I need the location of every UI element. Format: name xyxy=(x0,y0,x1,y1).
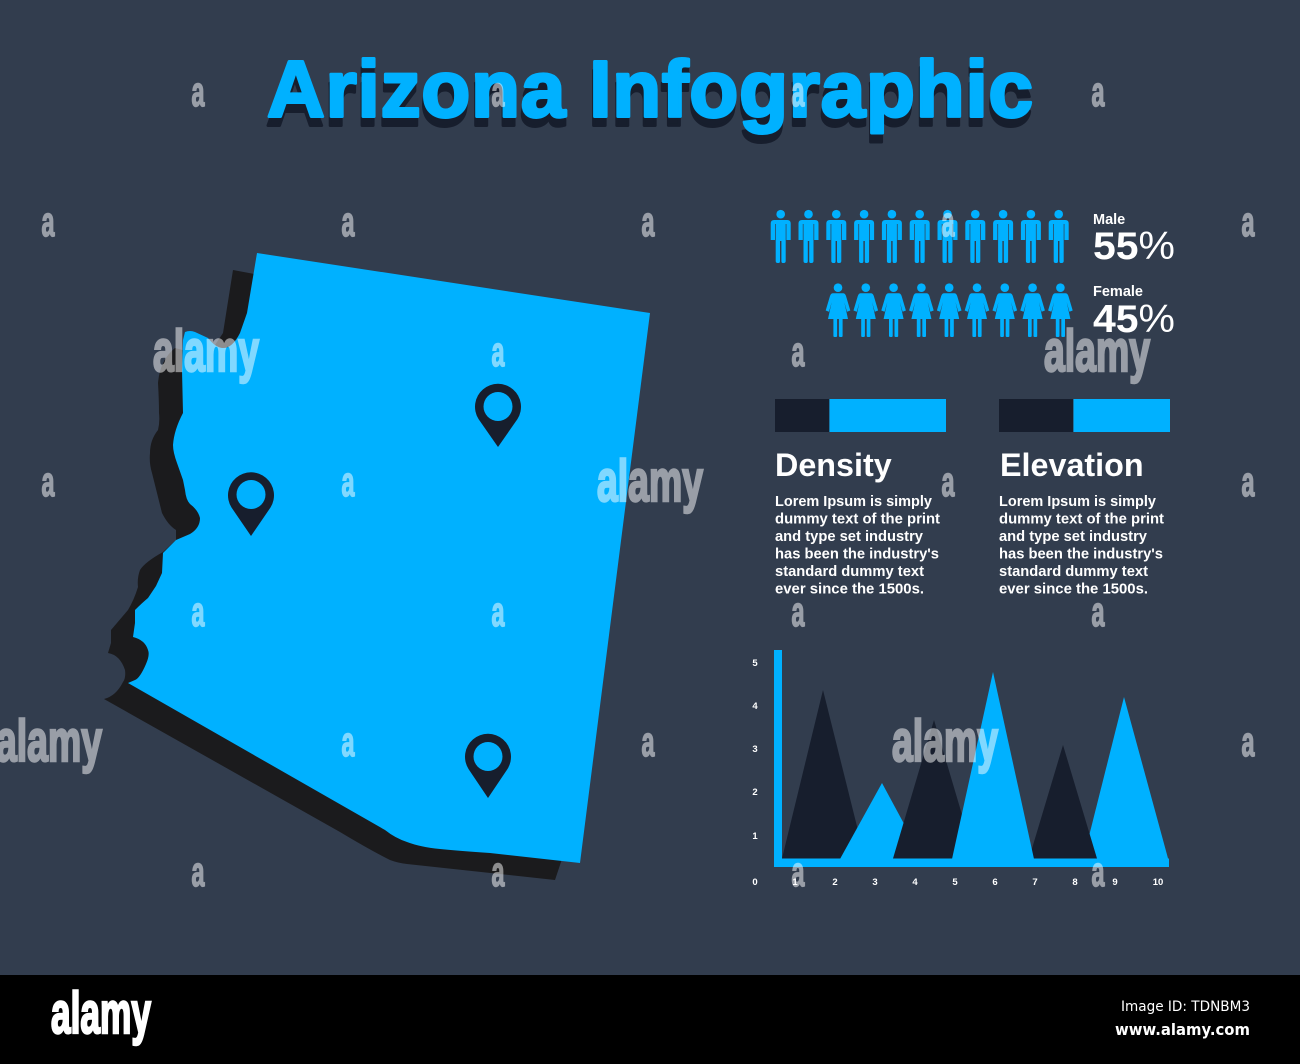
elevation text: Lorem Ipsum is simply xyxy=(999,494,1156,510)
image id: Image ID: TDNBM3 xyxy=(1121,999,1250,1015)
watermark pattern: a xyxy=(942,458,955,505)
watermark pattern: a xyxy=(342,198,355,245)
density text: ever since the 1500s. xyxy=(775,582,924,598)
map land xyxy=(128,253,650,863)
watermark pattern: a xyxy=(342,718,355,765)
map: Arizona state xyxy=(104,253,650,880)
density bar xyxy=(775,399,946,432)
elevation bar xyxy=(999,399,1170,432)
chart y axis labels: 4 xyxy=(752,701,758,712)
watermark pattern: a xyxy=(792,588,805,635)
watermark pattern: a xyxy=(1092,588,1105,635)
elevation text xyxy=(999,494,1164,598)
elevation text: ever since the 1500s. xyxy=(999,582,1148,598)
watermark pattern: alamy xyxy=(0,709,102,774)
chart x axis labels: 8 xyxy=(1072,877,1078,888)
density heading: Density xyxy=(775,447,892,483)
icon: map pin north xyxy=(475,384,521,447)
icon: map pin south xyxy=(465,734,511,798)
chart y axis labels: 3 xyxy=(752,744,758,755)
chart triangles xyxy=(782,672,1169,862)
watermark pattern: a xyxy=(492,68,505,115)
title: Arizona Infographic xyxy=(266,54,1032,142)
watermark pattern: a xyxy=(192,848,205,895)
triangle chart xyxy=(752,650,1169,888)
watermark pattern: a xyxy=(1242,718,1255,765)
watermark pattern: a xyxy=(42,458,55,505)
watermark pattern: a xyxy=(1092,68,1105,115)
chart x axis labels: 5 xyxy=(952,877,958,888)
watermark pattern: alamy xyxy=(597,449,703,514)
chart x axis labels: 0 xyxy=(752,877,758,888)
watermark pattern: a xyxy=(1242,198,1255,245)
watermark pattern: a xyxy=(1242,458,1255,505)
watermark pattern: alamy xyxy=(153,319,259,384)
chart y axis labels: 2 xyxy=(752,787,758,798)
chart y axis labels: 1 xyxy=(752,831,758,842)
watermark pattern: a xyxy=(492,848,505,895)
footer bar xyxy=(0,975,1300,1064)
icon: map pin west xyxy=(228,472,274,536)
watermark pattern: a xyxy=(192,588,205,635)
panel: density xyxy=(775,399,946,598)
chart x axis labels: 6 xyxy=(992,877,998,888)
density text: has been the industry's xyxy=(775,546,939,562)
watermark pattern: alamy xyxy=(1044,319,1150,384)
panel: elevation xyxy=(999,399,1170,598)
watermark pattern: a xyxy=(492,588,505,635)
map shadow xyxy=(104,270,565,880)
watermark pattern: a xyxy=(42,198,55,245)
watermark pattern: a xyxy=(642,718,655,765)
watermark pattern: a xyxy=(642,198,655,245)
elevation text: standard dummy text xyxy=(999,564,1148,580)
chart x axis labels: 1 xyxy=(792,877,798,888)
density text xyxy=(775,494,940,598)
footer logo: alamy xyxy=(51,981,151,1046)
chart y axis labels xyxy=(752,658,758,842)
elevation text: has been the industry's xyxy=(999,546,1163,562)
chart x axis labels: 10 xyxy=(1153,877,1163,888)
female statistic: 45% xyxy=(1093,298,1175,341)
watermark pattern: a xyxy=(942,198,955,245)
watermark pattern: a xyxy=(342,458,355,505)
chart y axis labels: 5 xyxy=(752,658,758,669)
chart x axis labels: 7 xyxy=(1032,877,1038,888)
elevation text: and type set industry xyxy=(999,529,1147,545)
watermark pattern: a xyxy=(792,68,805,115)
female statistic: Female xyxy=(1093,284,1143,300)
density text: dummy text of the print xyxy=(775,512,940,528)
watermark pattern: a xyxy=(792,328,805,375)
density text: and type set industry xyxy=(775,529,923,545)
elevation heading: Elevation xyxy=(1000,447,1144,483)
watermark pattern xyxy=(0,68,1255,895)
elevation text: dummy text of the print xyxy=(999,512,1164,528)
chart x axis labels: 3 xyxy=(872,877,878,888)
chart x axis labels: 2 xyxy=(832,877,838,888)
chart x axis labels xyxy=(752,877,1163,888)
male pictogram row xyxy=(771,210,1069,263)
chart x axis labels: 9 xyxy=(1112,877,1118,888)
female pictogram row xyxy=(826,283,1073,337)
density text: Lorem Ipsum is simply xyxy=(775,494,932,510)
title: Arizona Infographic xyxy=(267,44,1033,134)
male statistic: Male xyxy=(1093,212,1125,228)
watermark pattern: a xyxy=(192,68,205,115)
density text: standard dummy text xyxy=(775,564,924,580)
chart axes xyxy=(774,650,1169,867)
chart x axis labels: 4 xyxy=(912,877,918,888)
watermark pattern: a xyxy=(1092,848,1105,895)
watermark pattern: a xyxy=(492,328,505,375)
website: www.alamy.com xyxy=(1115,1020,1250,1039)
watermark pattern: a xyxy=(792,848,805,895)
male statistic: 55% xyxy=(1093,225,1175,268)
watermark pattern: alamy xyxy=(892,709,998,774)
